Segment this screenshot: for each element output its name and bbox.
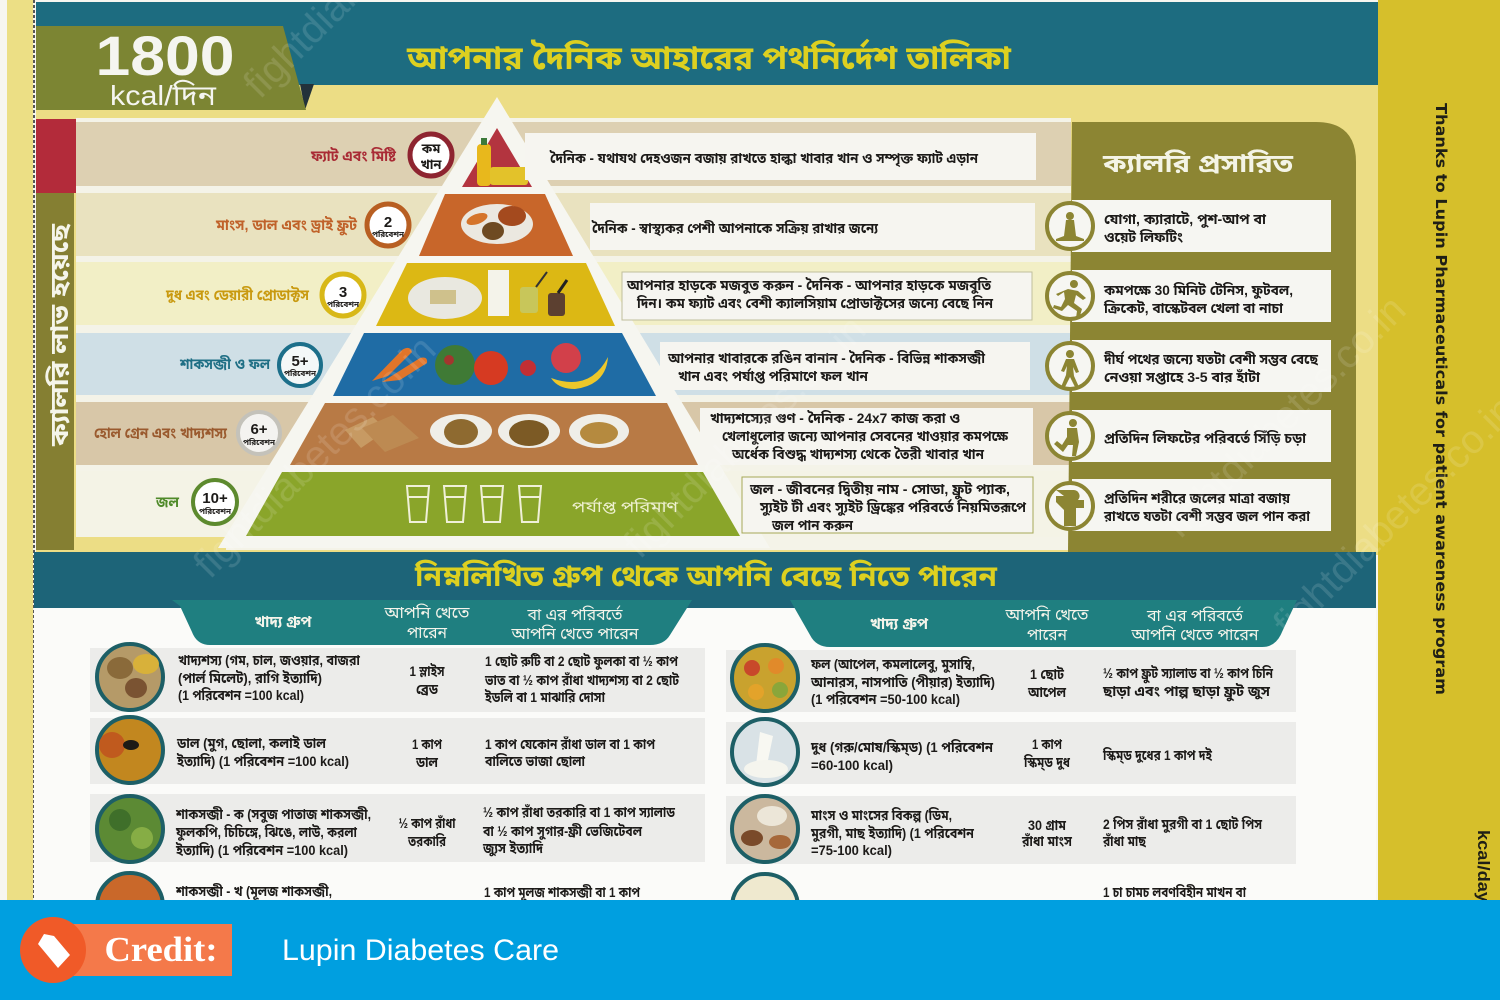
pyramid advice text boxes: খান এবং পর্যাপ্ত পরিমাণে ফল খান — [678, 367, 868, 385]
pyramid advice text boxes: দৈনিক - স্বাস্থ্যকর পেশী আপনাকে সক্রিয় রাখার জন্যে — [591, 220, 879, 236]
table text: right: স্কিম্ড দুধের 1 কাপ দই — [1102, 747, 1212, 764]
icon: meat — [732, 796, 798, 862]
pyramid tier: protein — [419, 194, 573, 256]
badge: 5+ servings: পরিবেশন — [284, 369, 317, 378]
serving labels: শাকসব্জী ও ফল — [179, 355, 271, 373]
table text: left: (পার্ল মিলেট), রাগি ইত্যাদি) — [178, 669, 322, 686]
table text: right: দুধ (গরু/মোষ/স্কিম্ড) (1 পরিবেশন — [810, 739, 993, 756]
credit bar — [0, 900, 1500, 1000]
badge: 5+ servings — [279, 344, 321, 386]
table text: right: 1 চা চামচ লবণবিহীন মাখন বা — [1103, 884, 1247, 900]
pyramid advice text boxes: জল - জীবনের দ্বিতীয় নাম - সোডা, ফ্রুট প্যাক, — [749, 481, 1010, 500]
table header: left: খাদ্য গ্রুপ — [254, 614, 312, 631]
calorie figure: 1800 — [96, 24, 234, 87]
table text: right: স্কিম্ড দুধ — [1023, 754, 1070, 771]
icon: fruit — [732, 645, 798, 711]
activity: drinking water: প্রতিদিন শরীরে জলের মাত্রা বজায় — [1104, 490, 1290, 506]
pyramid advice text boxes: খেলাধুলোর জন্যে আপনার সেবনের খাওয়ার কমপক্ষে — [722, 428, 1008, 445]
table text: left: ডাল (মুগ, ছোলা, কলাই ডাল — [176, 735, 326, 752]
pyramid advice text boxes: খাদ্যশস্যের গুণ - দৈনিক - 24x7 কাজ করা ও — [710, 410, 960, 426]
watermark — [185, 0, 1500, 646]
table text: left: শাকসব্জী - খ (মূলজ শাকসব্জী, — [175, 883, 332, 900]
table text: left: বালিতে ভাজা ছোলা — [484, 753, 586, 769]
table header: left: পারেন — [407, 625, 447, 642]
badge: 10+ servings: পরিবেশন — [199, 507, 232, 516]
table text: left: জ্যুস ইত্যাদি — [482, 840, 544, 856]
badge: 3 servings — [322, 274, 364, 316]
table header: right — [790, 600, 1297, 647]
activity: stairs: প্রতিদিন লিফটের পরিবর্তে সিঁড়ি চড়া — [1104, 429, 1307, 446]
table text: right: =75-100 kcal) — [811, 842, 892, 858]
icon: fats — [732, 874, 798, 940]
pyramid advice text boxes: জল পান করুন — [771, 517, 853, 533]
table header: right: বা এর পরিবর্তে — [1146, 606, 1244, 625]
badge: 6+ servings — [238, 412, 280, 454]
icon: pulses — [97, 717, 163, 783]
activity: yoga — [1047, 200, 1331, 252]
pyramid tier: vegetables and fruit — [333, 333, 656, 396]
icon: tag — [38, 934, 70, 968]
table text: left: ½ কাপ রাঁধা — [398, 814, 456, 831]
table text: left: তরকারি — [407, 833, 446, 849]
panel: food choice table background — [34, 606, 1376, 900]
credit label — [20, 917, 232, 983]
icon: root vegetables — [97, 873, 163, 939]
credit label: Credit: — [104, 930, 218, 969]
table text: left: ½ কাপ রাঁধা তরকারি বা 1 কাপ স্যালাড — [483, 803, 676, 820]
section banner — [34, 552, 1376, 608]
table text: left: 1 কাপ মূলজ শাকসব্জী বা 1 কাপ — [484, 884, 641, 901]
badge: 10+ servings: 10+ — [202, 490, 228, 507]
table text: right: 1 ছোট — [1030, 666, 1064, 682]
badge: eat less: কম — [421, 141, 441, 156]
table text: right — [810, 656, 1273, 900]
watermark: fightdiabetes.co.in — [1155, 287, 1414, 546]
pyramid advice text boxes: আপনার খাবারকে রঙিন বানান - দৈনিক - বিভিন্ন শাকসব্জী — [667, 350, 986, 366]
table text: right: ফল (আপেল, কমলালেবু, মুসাম্বি, — [810, 656, 975, 673]
badge: eat less — [410, 134, 452, 176]
table row shading — [90, 648, 1296, 864]
activity: walking: দীর্ঘ পথের জন্যে যতটা বেশী সম্ভব বেছে — [1103, 350, 1319, 367]
section banner: নিম্নলিখিত গ্রুপ থেকে আপনি বেছে নিতে পারেন — [414, 560, 998, 593]
activity: yoga: ওয়েট লিফটিং — [1104, 229, 1184, 245]
activity: sports: ক্রিকেট, বাস্কেটবল খেলা বা নাচা — [1103, 300, 1284, 316]
activity: walking — [1047, 340, 1331, 392]
pyramid advice text boxes: দিন। কম ফ্যাট এবং বেশী ক্যালসিয়াম প্রোডাক্টসের জন্যে বেছে নিন — [636, 295, 993, 311]
table header: left: আপনি খেতে পারেন — [510, 624, 639, 643]
table text: right: 30 গ্রাম — [1028, 817, 1066, 833]
icon: leafy vegetables — [97, 796, 163, 862]
serving badges — [193, 134, 452, 524]
pyramid — [218, 97, 770, 548]
table header: right: খাদ্য গ্রুপ — [870, 616, 928, 633]
right side strip — [1378, 0, 1500, 903]
table text: left: ব্রেড — [416, 681, 439, 697]
table text: right: ছাড়া এবং পাল্প ছাড়া ফ্রুট জুস — [1102, 683, 1271, 702]
table text: left: খাদ্যশস্য (গম, চাল, জওয়ার, বাজরা — [178, 652, 361, 668]
table text: right: 1 কাপ — [1032, 736, 1063, 752]
credit source: Lupin Diabetes Care — [282, 934, 559, 967]
table header: right: আপনি খেতে — [1004, 605, 1089, 624]
panel: calories burned — [1047, 122, 1356, 552]
activity: drinking water: রাখতে যতটা বেশী সম্ভব জল পান করা — [1103, 508, 1311, 524]
badge: 2 servings — [367, 204, 409, 246]
badge: 10+ servings — [193, 480, 237, 524]
serving labels: দুধ এবং ডেয়ারী প্রোডাক্টস — [165, 286, 309, 304]
table text: left: 1 ছোট রুটি বা 2 ছোট ফুলকা বা ½ কাপ — [485, 653, 679, 670]
cropped kcal per day note: kcal/day — [1474, 830, 1493, 903]
pyramid tier: dairy — [376, 263, 615, 326]
table text: left: বা ½ কাপ সুগার-ফ্রী ভেজিটেবল — [482, 823, 642, 840]
watermark: fightdiabetes.co.in — [185, 327, 444, 586]
badge: 2 servings: পরিবেশন — [372, 230, 405, 239]
title: আপনার দৈনিক আহারের পথনির্দেশ তালিকা — [406, 39, 1012, 76]
panel heading: ক্যালরি প্রসারিত — [1102, 149, 1293, 178]
table text: left: ইত্যাদি) (1 পরিবেশন =100 kcal) — [176, 753, 349, 769]
table text: right: মুরগী, মাছ ইত্যাদি) (1 পরিবেশন — [810, 825, 974, 842]
table header: right: পারেন — [1027, 627, 1067, 644]
table text: right: ½ কাপ ফ্রুট স্যালাড বা ½ কাপ চিনি — [1103, 665, 1273, 684]
table header: right: আপনি খেতে পারেন — [1130, 625, 1259, 644]
thanks note: Thanks to Lupin Pharmaceuticals for patient awareness program — [1432, 103, 1450, 695]
badge: 3 servings: 3 — [339, 284, 347, 301]
header banner — [36, 2, 1378, 111]
badge: 5+ servings: 5+ — [291, 353, 309, 370]
calorie unit: kcal/দিন — [110, 79, 217, 111]
table text: right: 2 পিস রাঁধা মুরগী বা 1 ছোট পিস — [1103, 815, 1263, 833]
table text: right: আনারস, নাসপাতি (পীয়ার) ইত্যাদি) — [810, 674, 995, 690]
watermark: fightdiabetes.co.in — [615, 307, 874, 566]
icon: cereals — [97, 644, 163, 710]
activity: sports: কমপক্ষে 30 মিনিট টেনিস, ফুটবল, — [1103, 282, 1293, 299]
table text: left: ফুলকপি, চিচিঙ্গে, ঝিঙে, লাউ, করলা — [175, 824, 358, 841]
badge: 3 servings: পরিবেশন — [327, 300, 360, 309]
table text: left: (1 পরিবেশন =100 kcal) — [178, 687, 304, 703]
activity: drinking water — [1047, 479, 1331, 531]
icons: left column food photos — [97, 644, 163, 939]
pyramid advice text boxes: স্যুইট টী এবং স্যুইট ড্রিঙ্কের পরিবর্তে নিয়মিতরূপে — [759, 498, 1027, 516]
activity: stairs — [1047, 410, 1331, 462]
table text: right: =60-100 kcal) — [811, 757, 893, 773]
table text: right: আপেল — [1027, 684, 1066, 700]
pyramid tier: fats — [462, 128, 532, 187]
icon: glasses of water — [407, 486, 541, 522]
badge: 2 servings: 2 — [384, 214, 392, 231]
table text: left: ইত্যাদি) (1 পরিবেশন =100 kcal) — [175, 842, 348, 858]
food bands — [76, 118, 1071, 550]
pyramid advice text boxes: দৈনিক - যথাযথ দেহওজন বজায় রাখতে হাল্কা খাবার খান ও সম্পৃক্ত ফ্যাট এড়ান — [549, 150, 978, 168]
badge: eat less: খান — [420, 157, 442, 172]
table text: left — [175, 652, 679, 901]
badge: 6+ servings: পরিবেশন — [243, 438, 276, 447]
table text: left: শাকসব্জী - ক (সবুজ পাতাজ শাকসব্জী, — [175, 806, 371, 823]
table text: left: 1 স্লাইস — [410, 663, 445, 679]
adequate amount label: পর্যাপ্ত পরিমাণ — [572, 498, 679, 516]
table text: left: ভাত বা ½ কাপ রাঁধা খাদ্যশস্য বা 2 ছোট — [484, 671, 679, 688]
pyramid advice text boxes: আপনার হাড়কে মজবুত করুন - দৈনিক - আপনার হাড়কে মজবুতি — [626, 277, 991, 294]
badge: 6+ servings: 6+ — [250, 421, 268, 438]
table text: right: রাঁধা মাছ — [1102, 832, 1147, 849]
serving labels: ফ্যাট এবং মিষ্টি — [310, 146, 397, 165]
activity: yoga: যোগা, ক্যারাটে, পুশ-আপ বা — [1104, 211, 1267, 228]
serving labels: হোল গ্রেন এবং খাদ্যশস্য — [94, 425, 228, 442]
table header: left: বা এর পরিবর্তে — [527, 605, 623, 624]
pyramid tier: whole grains — [290, 403, 698, 465]
table text: right: রাঁধা মাংস — [1021, 832, 1073, 849]
pyramid advice text boxes: অর্ধেক বিশুদ্ধ খাদ্যশস্য থেকে তৈরী খাবার খান — [731, 445, 984, 462]
pyramid advice text boxes — [525, 133, 1036, 533]
left calories gained label — [36, 119, 76, 550]
table text: left: ইডলি বা 1 মাঝারি দোসা — [484, 689, 606, 705]
icon: milk — [732, 719, 798, 785]
panel: pale yellow background — [36, 80, 1378, 555]
serving labels — [94, 146, 397, 511]
activity: sports — [1047, 270, 1331, 322]
table header: left: আপনি খেতে — [383, 603, 470, 622]
table text: right: মাংস ও মাংসের বিকল্প (ডিম, — [810, 807, 952, 823]
table text: left: ডাল — [415, 754, 438, 770]
table text: left: 1 কাপ যেকোন রাঁধা ডাল বা 1 কাপ — [485, 735, 656, 752]
icons: right column food photos — [732, 645, 798, 940]
serving labels: জল — [155, 494, 180, 511]
serving labels: মাংস, ডাল এবং ড্রাই ফ্রুট — [215, 216, 358, 237]
pyramid tier: water — [246, 472, 740, 536]
table text: right: (1 পরিবেশন =50-100 kcal) — [811, 691, 960, 707]
activity: walking: নেওয়া সপ্তাহে 3-5 বার হাঁটা — [1104, 368, 1261, 386]
table text: left: 1 কাপ — [412, 736, 443, 752]
left calories gained label: ক্যালরি লাভ হয়েছে — [45, 223, 74, 447]
table header: left — [172, 600, 692, 645]
